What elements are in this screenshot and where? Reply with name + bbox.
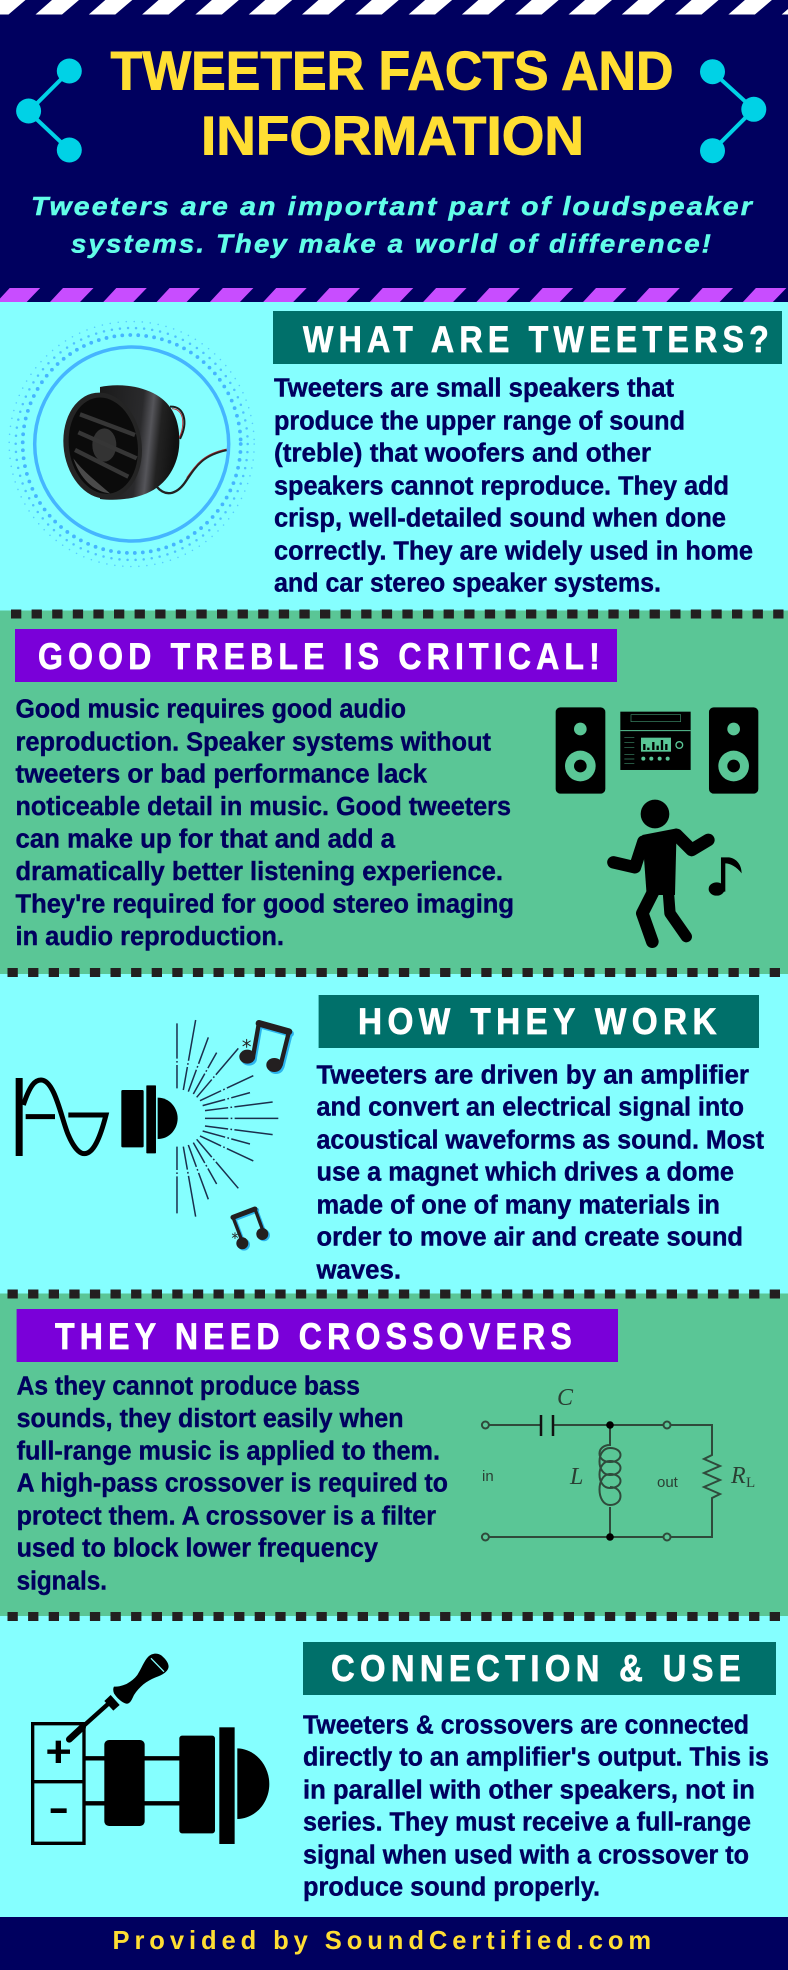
heading: connection and use: CONNECTION & USE xyxy=(331,1648,746,1689)
icon: left network nodes xyxy=(16,58,82,162)
text block: what are tweeters: correctly. They are widely used in home xyxy=(274,537,753,565)
text block: what are tweeters: and car stereo speaker systems. xyxy=(274,570,661,598)
text block: good treble: dramatically better listening experience. xyxy=(16,858,503,886)
panel: connection and use xyxy=(33,1642,776,1902)
text block: good treble: Good music requires good audio xyxy=(16,696,406,724)
chart: high-pass crossover circuit diagram xyxy=(482,1385,755,1541)
icon: right speaker xyxy=(709,707,758,794)
chart: high-pass crossover circuit diagram: out xyxy=(657,1474,679,1491)
chart: high-pass crossover circuit diagram: L xyxy=(746,1475,755,1491)
footer: Provided by SoundCertified.com xyxy=(112,1925,656,1955)
text block: crossovers: As they cannot produce bass xyxy=(17,1372,360,1400)
subtitle: systems. They make a world of difference! xyxy=(71,229,713,259)
text block: how they work: and convert an electrical signal into xyxy=(316,1094,744,1122)
title: INFORMATION xyxy=(201,105,584,167)
icon: tweeter photo in dotted ring xyxy=(9,322,254,566)
icon: amplifier terminals, screwdriver, crossover and tweeter xyxy=(33,1654,269,1844)
text block: what are tweeters: (treble) that woofers and other xyxy=(274,440,651,468)
panel: what are tweeters xyxy=(9,311,782,598)
text block: what are tweeters: Tweeters are small speakers that xyxy=(274,375,675,403)
header band xyxy=(0,0,788,302)
text block: how they work: acoustical waveforms as sound. Most xyxy=(316,1126,764,1154)
panel: they need crossovers xyxy=(17,1309,755,1595)
panel: good treble is critical xyxy=(15,629,758,951)
text block: crossovers: protect them. A crossover is a filter xyxy=(17,1502,436,1530)
text block: crossovers: used to block lower frequency xyxy=(17,1535,379,1563)
heading: they need crossovers xyxy=(17,1309,618,1362)
chart: high-pass crossover circuit diagram: R xyxy=(730,1463,746,1489)
panel: crossovers background xyxy=(0,1294,788,1616)
title xyxy=(110,40,674,167)
text block: good treble: They're required for good stereo imaging xyxy=(16,890,514,918)
text block: how they work xyxy=(315,1061,764,1284)
title: TWEETER FACTS AND xyxy=(110,40,674,102)
text block: what are tweeters: speakers cannot reproduce. They add xyxy=(274,472,729,500)
text block: how they work: waves. xyxy=(315,1256,401,1284)
text block: crossovers xyxy=(17,1372,448,1595)
heading: how they work: HOW THEY WORK xyxy=(358,1001,722,1042)
icon: small music note xyxy=(232,1209,270,1251)
text block: what are tweeters: produce the upper range of sound xyxy=(274,407,685,435)
chart: high-pass crossover circuit diagram: L xyxy=(569,1464,583,1490)
icon: large music note xyxy=(239,1023,291,1074)
text block: what are tweeters xyxy=(274,375,753,598)
icon: dancing person xyxy=(613,800,708,942)
panel: how they work xyxy=(16,995,764,1284)
heading: good treble: GOOD TREBLE IS CRITICAL! xyxy=(38,636,605,677)
text block: good treble: reproduction. Speaker systems without xyxy=(16,728,492,756)
icon: speaker xyxy=(121,1085,178,1153)
icon: music note xyxy=(709,857,742,896)
chart: high-pass crossover circuit diagram: in xyxy=(482,1468,494,1485)
text block: crossovers: A high-pass crossover is required to xyxy=(17,1470,448,1498)
text block: crossovers: full-range music is applied to them. xyxy=(17,1437,440,1465)
icon: left speaker xyxy=(556,707,605,794)
text block: connection and use: produce sound properly. xyxy=(303,1874,600,1902)
footer xyxy=(0,1917,788,1970)
text block: good treble: in audio reproduction. xyxy=(16,923,284,951)
text block: connection and use: signal when used with a crossover to xyxy=(303,1841,749,1869)
chart: high-pass crossover circuit diagram: C xyxy=(557,1385,574,1411)
subtitle xyxy=(31,191,754,259)
text block: good treble: tweeters or bad performance lack xyxy=(16,761,428,789)
text block: connection and use: Tweeters & crossovers are connected xyxy=(303,1711,749,1739)
text block: connection and use xyxy=(303,1711,769,1902)
text block: what are tweeters: crisp, well-detailed sound when done xyxy=(274,505,726,533)
icon: sine wave, tweeter, sound rays, notes xyxy=(16,1020,291,1251)
icon: screwdriver xyxy=(69,1654,169,1739)
icon: receiver xyxy=(620,712,691,770)
text block: good treble: noticeable detail in music. Good tweeters xyxy=(16,793,511,821)
text block: how they work: made of one of many materials in xyxy=(316,1191,720,1219)
icon: sound rays xyxy=(177,1020,278,1217)
text block: connection and use: in parallel with other speakers, not in xyxy=(303,1776,755,1804)
icon: sine wave xyxy=(16,1078,106,1156)
panel: good treble background xyxy=(0,610,788,974)
text block: how they work: order to move air and create sound xyxy=(316,1224,743,1252)
text block: how they work: use a magnet which drives a dome xyxy=(316,1159,734,1187)
icon: terminal box xyxy=(33,1724,84,1843)
text block: crossovers: sounds, they distort easily when xyxy=(17,1405,403,1433)
text block: crossovers: signals. xyxy=(17,1567,107,1595)
heading: they need crossovers: THEY NEED CROSSOVERS xyxy=(55,1316,577,1357)
heading: good treble xyxy=(15,629,617,682)
text block: connection and use: directly to an amplifier's output. This is xyxy=(303,1744,769,1772)
text block: good treble: can make up for that and add a xyxy=(16,825,396,853)
text block: good treble xyxy=(16,696,514,951)
text block: connection and use: series. They must receive a full-range xyxy=(303,1809,751,1837)
text block: how they work: Tweeters are driven by an amplifier xyxy=(316,1061,749,1089)
icon: right network nodes xyxy=(700,59,766,163)
icon: stereo and dancing person xyxy=(556,707,758,942)
subtitle: Tweeters are an important part of loudspeaker xyxy=(31,191,754,221)
icon: crossover and tweeter xyxy=(84,1727,269,1844)
